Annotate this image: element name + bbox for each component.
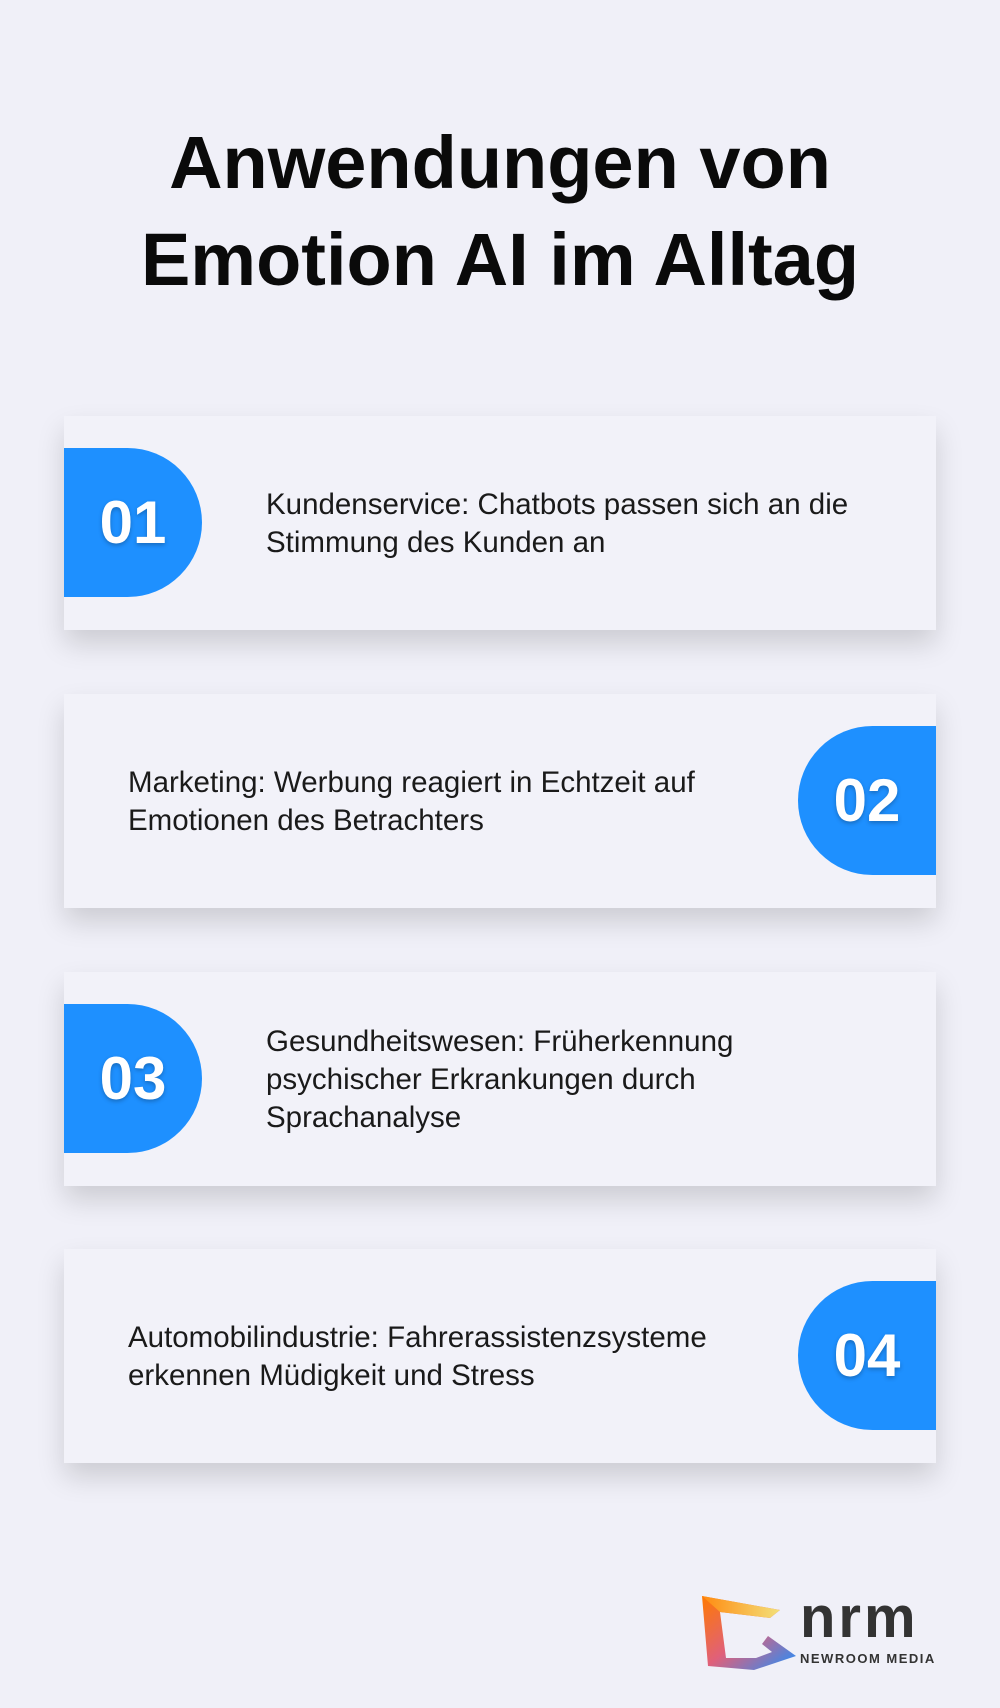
panel: card 1 (64, 416, 936, 630)
badge 01 (64, 448, 202, 597)
badge 02 (798, 726, 936, 875)
title: Emotion AI im Alltag (141, 218, 859, 301)
badge 03 (64, 1004, 202, 1153)
badge 04: 04 (834, 1322, 900, 1389)
title: Anwendungen von (169, 121, 831, 204)
panel: card 4 (64, 1249, 936, 1463)
panel: card 2 (64, 694, 936, 908)
logo: NEWROOM MEDIA (800, 1651, 936, 1666)
badge 01: 01 (100, 489, 166, 556)
badge 03: 03 (100, 1045, 166, 1112)
panel: card 3 (64, 972, 936, 1186)
text 4: Automobilindustrie: Fahrerassistenzsysteme erkennen Müdigkeit und Stress (128, 1321, 707, 1392)
text 2: Marketing: Werbung reagiert in Echtzeit auf Emotionen des Betrachters (128, 766, 695, 837)
badge 04 (798, 1281, 936, 1430)
icon: logo mark (702, 1596, 796, 1670)
title (141, 121, 859, 301)
badge 02: 02 (834, 767, 900, 834)
text 1: Kundenservice: Chatbots passen sich an die Stimmung des Kunden an (266, 488, 848, 559)
logo (702, 1585, 936, 1670)
text 3: Gesundheitswesen: Früherkennung psychischer Erkrankungen durch Sprachanalyse (266, 1025, 733, 1134)
logo text: nrm (800, 1585, 919, 1650)
